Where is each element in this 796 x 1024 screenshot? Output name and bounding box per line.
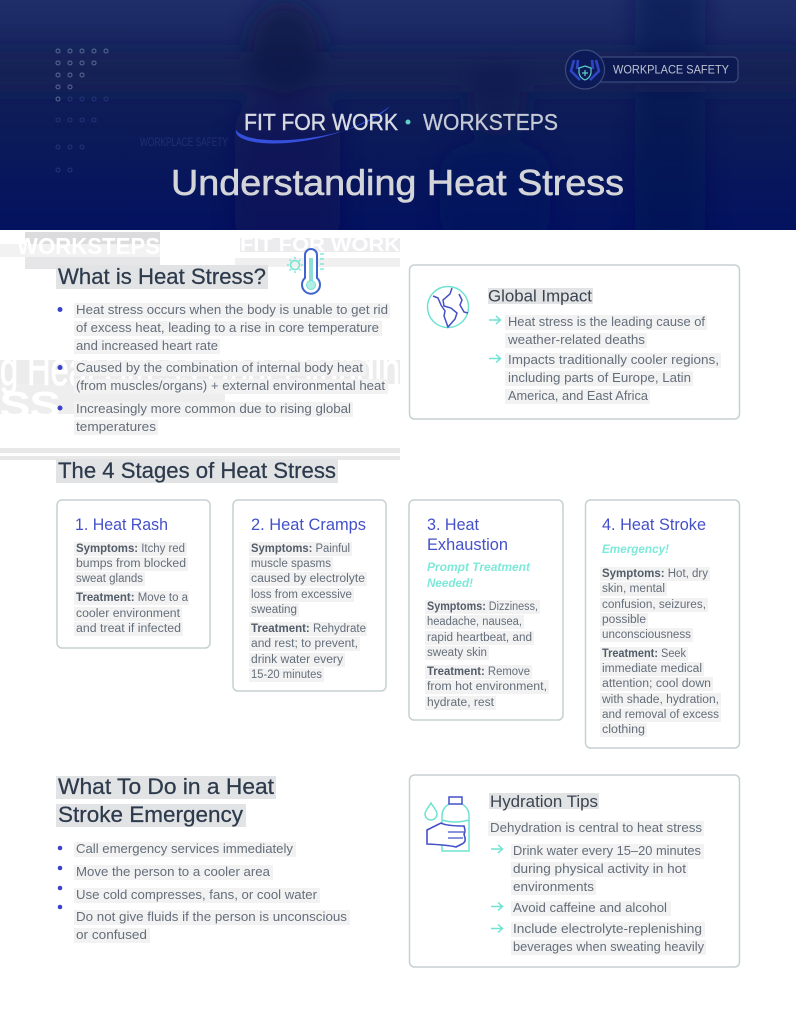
panel: stage 2 heat cramps: loss from excessive: [251, 589, 352, 601]
list: what is heat stress: [58, 303, 390, 435]
ghost artifact: WorkSteps strip: WORKSTEPS: [17, 233, 160, 259]
panel: stage 1 heat rash: [57, 500, 210, 648]
icon: hand holding bottle: [425, 797, 469, 851]
panel: stage 3 heat exhaustion: Exhaustion: [427, 535, 508, 554]
list: global impact: weather-related deaths: [507, 333, 645, 347]
panel: stage 1 heat rash: 1. Heat Rash: [75, 515, 168, 534]
list: what is heat stress: of excess heat, leading to a rise in core temperature: [76, 321, 379, 335]
list: hydration tips: [491, 844, 706, 955]
panel: stage 2 heat cramps: and rest; to prevent,: [251, 638, 358, 650]
ghost badge text: WORKPLACE SAFETY: [140, 135, 228, 149]
list: what is heat stress: Increasingly more common due to rising global: [76, 402, 351, 416]
panel: stage 2 heat cramps: sweating: [251, 604, 297, 616]
list: global impact: America, and East Africa: [508, 389, 648, 403]
panel: stage 1 heat rash: Symptoms: Itchy red: [76, 543, 185, 555]
panel: stage 1 heat rash: sweat glands: [76, 573, 143, 585]
panel: stage 3 heat exhaustion: hydrate, rest: [427, 697, 495, 709]
list: global impact: Heat stress is the leading cause of: [508, 315, 706, 329]
panel: stage 3 heat exhaustion: 3. Heat: [427, 515, 479, 534]
panel: stage 2 heat cramps: 2. Heat Cramps: [251, 515, 366, 534]
list: global impact: including parts of Europe, Latin: [508, 371, 691, 385]
logo separator dot: [406, 120, 410, 124]
panel: stage 2 heat cramps: Treatment: Rehydrate: [251, 623, 366, 635]
list: what is heat stress: and increased heart rate: [76, 339, 218, 353]
panel: stage 4 heat stroke: confusion, seizures,: [602, 599, 706, 611]
panel: stage 4 heat stroke: Symptoms: Hot, dry: [602, 568, 708, 580]
panel: stage 4 heat stroke: Treatment: Seek: [602, 648, 686, 660]
panel: stage 3 heat exhaustion: rapid heartbeat, and: [427, 632, 532, 644]
ghost artifact: Fit for Work strip: [235, 235, 400, 267]
panel: stage 3 heat exhaustion: Treatment: Remove: [427, 666, 530, 678]
list: hydration tips: Avoid caffeine and alcohol: [513, 901, 667, 915]
panel: global impact: [410, 265, 740, 419]
panel: stage 2 heat cramps: 15-20 minutes: [251, 669, 322, 681]
ghost artifact: large title strip: g Heat Stress Understandin: [0, 343, 400, 395]
list: emergency steps: Use cold compresses, fans, or cool water: [76, 888, 317, 902]
panel: stage 4 heat stroke: and removal of excess: [602, 709, 719, 721]
panel: stage 4 heat stroke: [586, 500, 740, 748]
list: what is heat stress: temperatures: [76, 420, 156, 434]
icon: globe: [428, 286, 468, 328]
panel: stage 3 heat exhaustion: Symptoms: Dizziness,: [427, 601, 538, 613]
heading: What is Heat Stress: What is Heat Stress?: [58, 264, 266, 289]
panel: stage 4 heat stroke: clothing: [602, 724, 645, 736]
list: what is heat stress: (from muscles/organs) + external environmental heat: [76, 379, 386, 393]
panel: stage 4 heat stroke: unconsciousness: [602, 629, 691, 641]
ghost artifact: large title strip: [0, 343, 400, 427]
panel: stage 3 heat exhaustion: Needed!: [427, 576, 473, 590]
panel: stage 4 heat stroke: possible: [602, 614, 646, 626]
badge: workplace safety: [566, 50, 738, 89]
list: emergency steps: Do not give fluids if the person is unconscious: [76, 910, 347, 924]
panel: stage 4 heat stroke: with shade, hydration,: [601, 694, 719, 706]
panel: stage 2 heat cramps: [233, 500, 386, 691]
heading: the 4 stages: The 4 Stages of Heat Stress: [58, 458, 336, 483]
panel: stage 4 heat stroke: Emergency!: [602, 542, 669, 556]
logo swirl: [236, 106, 390, 143]
list: hydration tips: environments: [513, 880, 594, 894]
list: what is heat stress: Caused by the combination of internal body heat: [76, 361, 364, 375]
panel: stage 1 heat rash: Treatment: Move to a: [76, 592, 189, 604]
header banner: [0, 0, 796, 250]
logo: Fit for Work: FIT FOR WORK: [244, 109, 399, 135]
panel: stage 2 heat cramps: caused by electrolyte: [251, 573, 365, 585]
panel: stage 1 heat rash: cooler environment: [76, 608, 181, 620]
panel: stage 4 heat stroke: immediate medical: [602, 663, 702, 675]
panel: stage 3 heat exhaustion: sweaty skin: [427, 647, 487, 659]
panel: stage 3 heat exhaustion: [409, 500, 563, 720]
text: hydration intro: Dehydration is central to heat stress: [490, 821, 702, 835]
dot grid: [56, 49, 108, 172]
list: hydration tips: beverages when sweating heavily: [513, 940, 705, 954]
ghost artifact: WorkSteps strip: [0, 232, 160, 269]
list: emergency steps: [58, 842, 350, 943]
icon: thermometer and sun: [287, 249, 324, 294]
panel: stage 4 heat stroke: 4. Heat Stroke: [602, 515, 706, 534]
ghost artifact: Fit for Work strip: FIT FOR WORK: [240, 235, 400, 256]
heading: what to do in a heat stroke emergency: Stroke Emergency: [58, 802, 243, 827]
heading: what to do in a heat stroke emergency: What To Do in a Heat: [58, 774, 274, 799]
icon: hands and shield: [571, 60, 599, 80]
panel: stage 2 heat cramps: Symptoms: Painful: [251, 543, 350, 555]
panel: stage 4 heat stroke: skin, mental: [602, 583, 665, 595]
panel: stage 4 heat stroke: attention; cool down: [602, 678, 711, 690]
main title: Understanding Heat Stress: [171, 162, 624, 203]
list: hydration tips: Drink water every 15–20 minutes: [513, 844, 701, 858]
heading: hydration tips: Hydration Tips: [490, 792, 598, 811]
list: emergency steps: Call emergency services immediately: [76, 842, 294, 856]
panel: stage 2 heat cramps: muscle spasms: [251, 558, 331, 570]
ghost artifact: bands: [0, 448, 400, 460]
panel: stage 1 heat rash: bumps from blocked: [76, 558, 186, 570]
list: what is heat stress: Heat stress occurs when the body is unable to get rid: [76, 303, 388, 317]
panel: hydration tips: [410, 775, 740, 967]
list: global impact: Impacts traditionally cooler regions,: [508, 353, 719, 367]
list: hydration tips: during physical activity in hot: [513, 862, 687, 876]
panel: stage 2 heat cramps: drink water every: [251, 654, 343, 666]
heading: what to do in a heat stroke emergency: [56, 774, 276, 827]
heading: global impact: Global Impact: [488, 286, 592, 306]
panel: stage 3 heat exhaustion: from hot environment,: [427, 681, 547, 693]
panel: stage 1 heat rash: and treat if infected: [76, 623, 181, 635]
list: emergency steps: or confused: [76, 928, 147, 942]
list: global impact: [489, 315, 721, 404]
panel: stage 3 heat exhaustion: Prompt Treatment: [427, 560, 531, 574]
list: emergency steps: Move the person to a cooler area: [76, 865, 270, 879]
ghost artifact: large title strip: ss: [0, 375, 60, 427]
logo: WorkSteps: WORKSTEPS: [423, 109, 558, 135]
badge: workplace safety: WORKPLACE SAFETY: [613, 62, 729, 76]
panel: stage 3 heat exhaustion: headache, nausea,: [427, 616, 522, 628]
list: hydration tips: Include electrolyte-replenishing: [513, 922, 702, 936]
